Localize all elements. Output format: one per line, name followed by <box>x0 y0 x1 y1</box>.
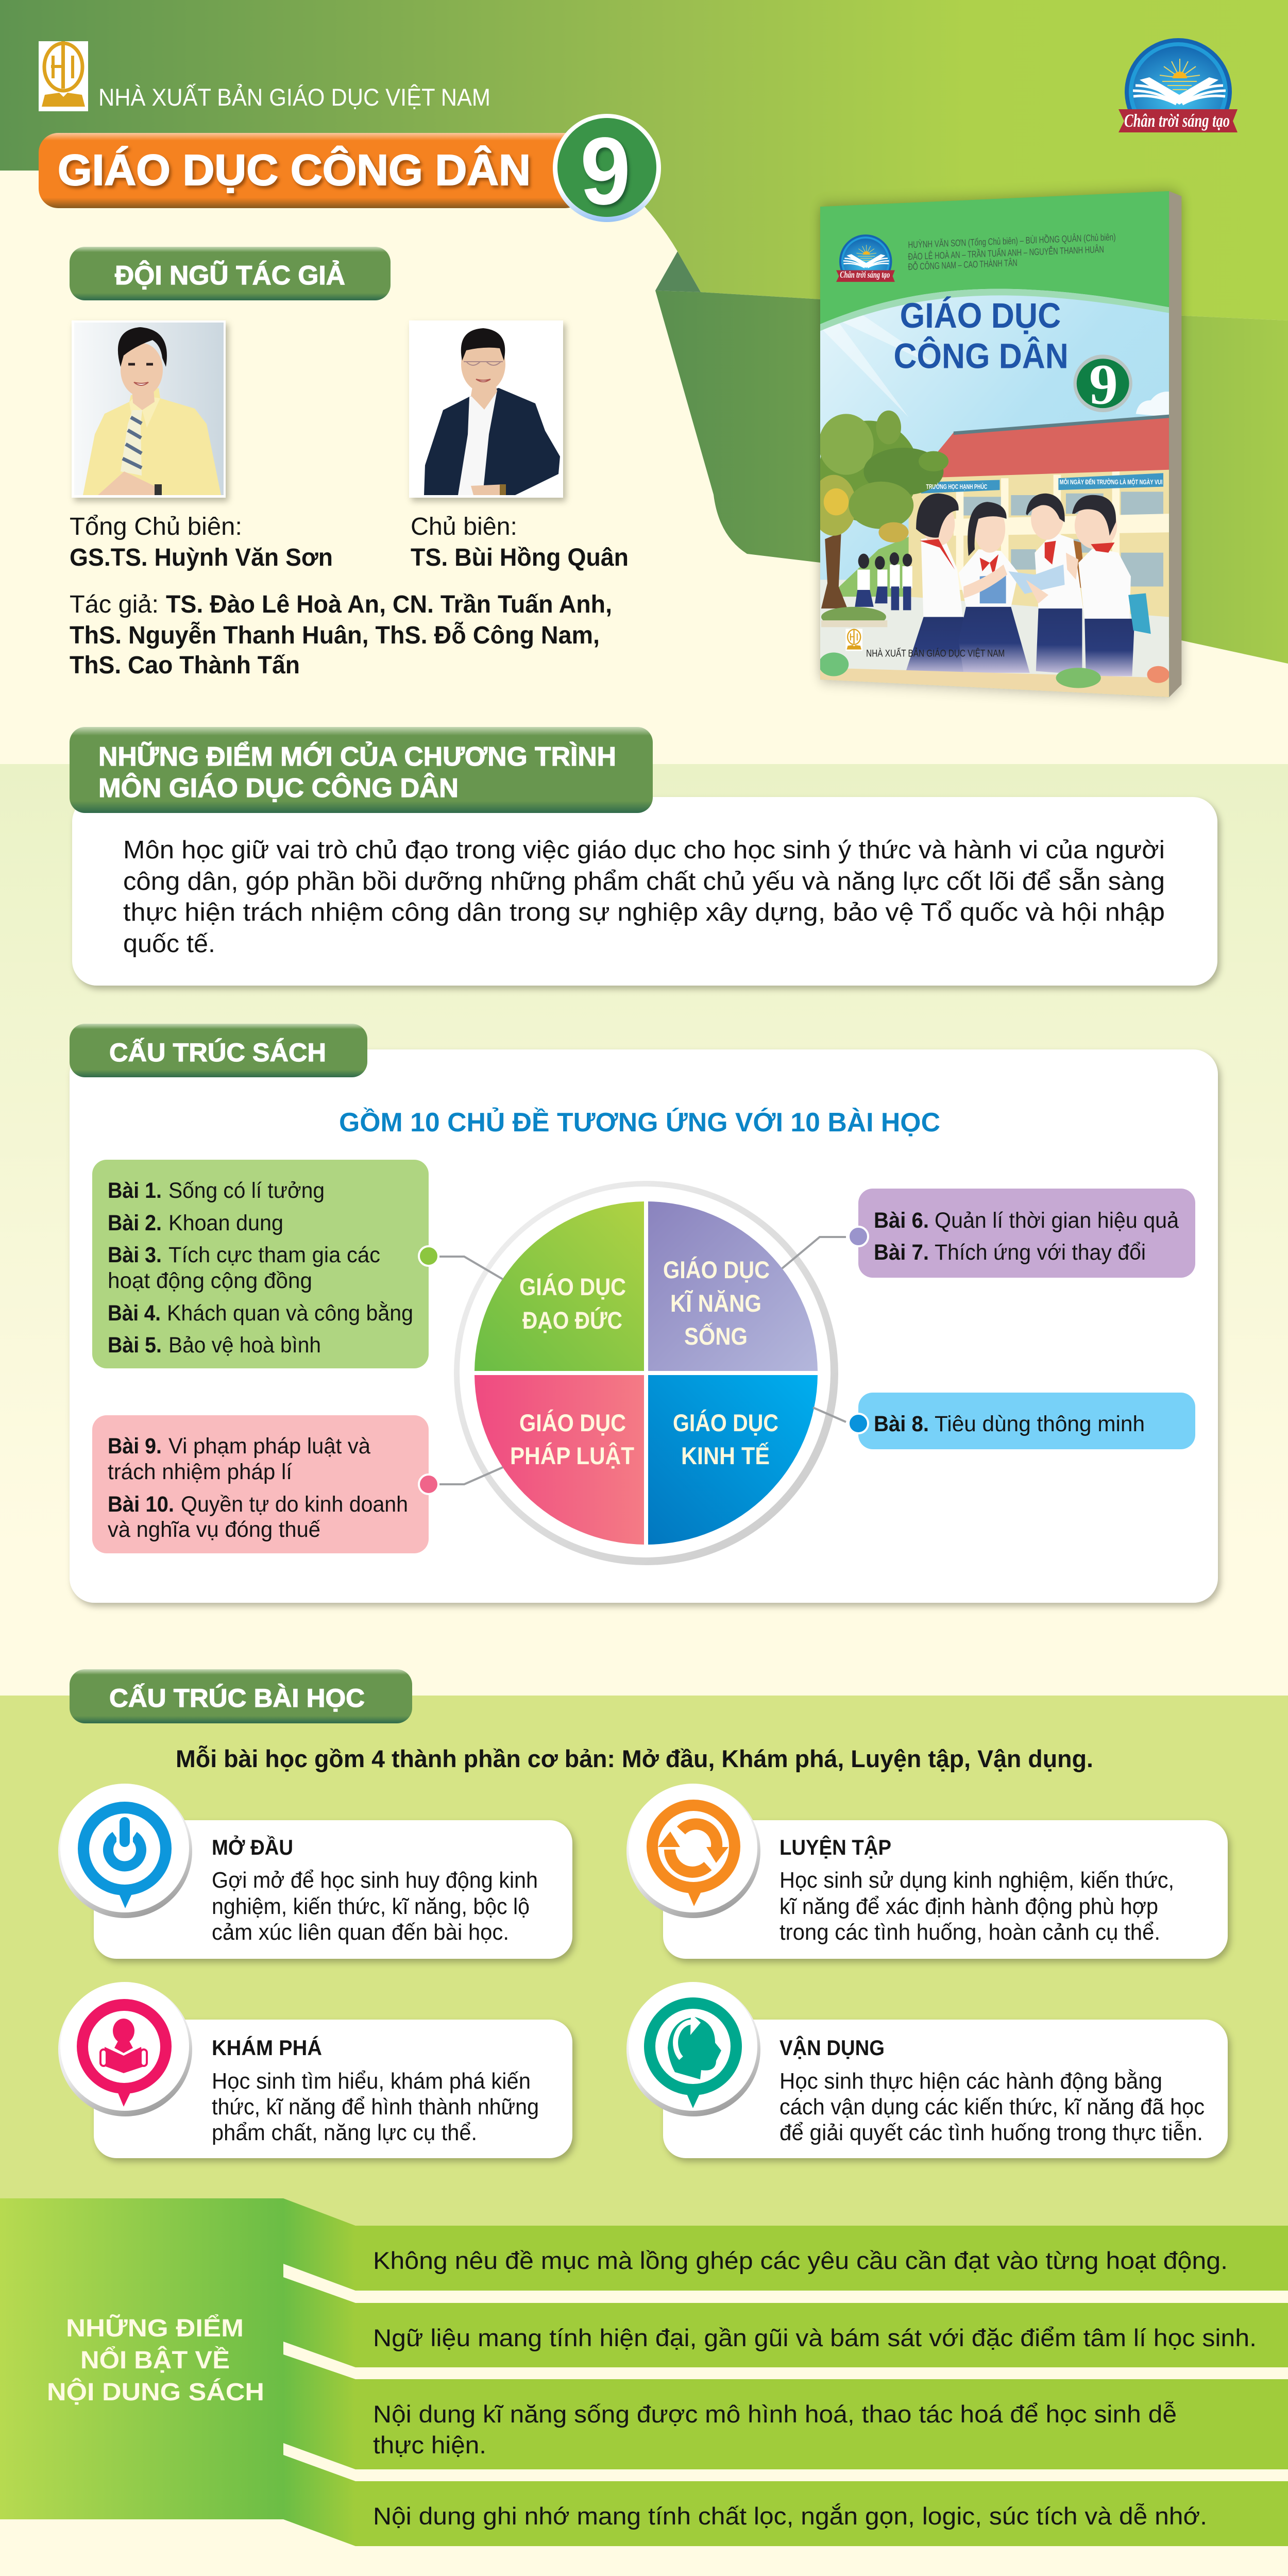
text: authors: ThS. Nguyễn Thanh Huân, ThS. Đỗ Công Nam, <box>70 621 600 649</box>
book authors: ĐÀO LÊ HOÀ AN – TRẦN TUẤN ANH – NGUYỄN THANH HUÂN <box>908 244 1104 262</box>
quadrant: law education <box>474 1375 644 1545</box>
title banner: 9 <box>580 118 631 225</box>
box: economic education lesson: Tiêu dùng thông minh <box>935 1412 1145 1436</box>
card: explore: thức, kĩ năng để hình thành những <box>212 2094 539 2120</box>
book authors: HUỲNH VĂN SƠN (Tổng Chủ biên) – BÙI HỒNG QUÂN (Chủ biên) <box>908 231 1116 250</box>
band: highlight 3: Nội dung kĩ năng sống được mô hình hoá, thao tác hoá để học sinh dễ <box>373 2400 1177 2428</box>
box: law education lessons: Quyền tự do kinh doanh <box>181 1492 408 1517</box>
box: life skills lessons: Bài 6. <box>874 1208 929 1233</box>
text: authors <box>70 591 612 679</box>
icon: power <box>58 1784 192 1918</box>
block: content highlights: NỔI BẬT VỀ <box>80 2346 230 2374</box>
title banner: GIÁO DỤC CÔNG DÂN <box>58 146 531 194</box>
quadrant: law education: PHÁP LUẬT <box>510 1442 634 1469</box>
box: moral education lessons: Bài 3. <box>108 1243 162 1267</box>
band: highlight 1 <box>355 2226 1288 2291</box>
quadrant: life skills: SỐNG <box>684 1323 748 1350</box>
card: application: VẬN DỤNG <box>779 2035 885 2060</box>
book grade badge: 9 <box>1089 353 1118 417</box>
box: moral education lessons: Bài 1. <box>108 1178 162 1203</box>
box: moral education lessons: Bài 4. <box>108 1301 161 1326</box>
connector lines <box>439 1237 846 1484</box>
box: law education lessons: Bài 9. <box>108 1434 162 1459</box>
card: opening: nghiệm, kiến thức, kĩ năng, bộc lộ <box>212 1894 530 1919</box>
heading: book structure: CẤU TRÚC SÁCH <box>109 1038 326 1067</box>
block: content highlights <box>0 2198 283 2519</box>
quadrant: economic education: KINH TẾ <box>681 1442 770 1469</box>
text: chief editor: Tổng Chủ biên: <box>70 513 242 540</box>
text: program description <box>123 836 1165 958</box>
band: highlight 1: Không nêu đề mục mà lồng ghép các yêu cầu cần đạt vào từng hoạt động. <box>373 2247 1228 2274</box>
band: highlight 2 <box>355 2303 1288 2367</box>
book logo: Chân trời sáng tạo <box>840 270 890 280</box>
card: practice: trong các tình huống, hoàn cảnh cụ thể. <box>779 1920 1160 1945</box>
card: practice <box>626 1784 1228 1959</box>
box: moral education lessons: Khoan dung <box>168 1211 283 1235</box>
text: authors: TS. Đào Lê Hoà An, CN. Trần Tuấn Anh, <box>166 591 612 618</box>
book title <box>893 295 1069 376</box>
box: moral education lessons: hoạt động cộng đồng <box>108 1268 312 1293</box>
quadrant: moral education: ĐẠO ĐỨC <box>522 1307 622 1334</box>
text: editor <box>411 513 629 571</box>
icon: head with arrow <box>626 1982 760 2116</box>
book logo <box>836 234 895 282</box>
card: application: Học sinh thực hiện các hành động bằng <box>779 2069 1162 2094</box>
box: moral education lessons: Bảo vệ hoà bình <box>168 1333 321 1358</box>
lesson structure summary: Mỗi bài học gồm 4 thành phần cơ bản: Mở đầu, Khám phá, Luyện tập, Vận dụng. <box>176 1745 1093 1772</box>
book cover: main textbook <box>804 180 1181 705</box>
card: explore <box>58 1982 572 2158</box>
band: highlight 4 <box>355 2481 1288 2546</box>
box: economic education lesson <box>858 1393 1195 1449</box>
section background: lesson structure <box>0 1696 1288 2226</box>
box: life skills lessons: Thích ứng với thay đổi <box>935 1240 1146 1265</box>
slanted connectors <box>283 2198 355 2546</box>
card: opening: Gợi mở để học sinh huy động kinh <box>212 1868 538 1893</box>
text: chief editor <box>70 513 333 571</box>
heading: lesson structure <box>70 1669 412 1723</box>
card: opening: MỞ ĐẦU <box>212 1835 293 1859</box>
topic circle chart <box>454 1181 838 1565</box>
quadrant: economic education <box>648 1375 818 1545</box>
quadrant: law education: GIÁO DỤC <box>519 1409 626 1436</box>
dark green leaf shape <box>655 291 1288 664</box>
band: highlight 3 <box>355 2379 1288 2469</box>
heading: new points <box>70 727 653 813</box>
section background: program <box>0 764 1288 1588</box>
text: program description: công dân, góp phần bồi dưỡng những phẩm chất chủ yếu và năng lực cốt lõi để sẵn sàng <box>123 868 1165 895</box>
box: law education lessons <box>92 1415 429 1553</box>
book title: GIÁO DỤC <box>900 295 1061 335</box>
box: life skills lessons: Bài 7. <box>874 1240 929 1265</box>
connector dots <box>419 1227 868 1494</box>
box: law education lessons: trách nhiệm pháp lí <box>108 1460 292 1484</box>
band: highlight 2: Ngữ liệu mang tính hiện đại, gần gũi và bám sát với đặc điểm tâm lí học sinh. <box>373 2324 1257 2351</box>
quadrant: moral education: GIÁO DỤC <box>519 1273 626 1300</box>
header green background <box>0 0 1288 320</box>
book signs <box>926 479 1163 491</box>
heading: author team <box>70 247 391 300</box>
card: practice: Học sinh sử dụng kinh nghiệm, kiến thức, <box>779 1868 1174 1893</box>
book authors <box>908 231 1116 273</box>
box: law education lessons: Vi phạm pháp luật và <box>168 1434 370 1459</box>
icon: reader <box>58 1982 192 2116</box>
text: authors: Tác giả: <box>70 591 159 618</box>
quadrant: moral education <box>474 1201 644 1371</box>
box: economic education lesson: Bài 8. <box>874 1412 929 1436</box>
panel: book structure <box>70 1024 1218 1603</box>
book authors: ĐỖ CÔNG NAM – CAO THÀNH TÂN <box>908 257 1018 273</box>
text: editor: TS. Bùi Hồng Quân <box>411 544 629 571</box>
panel: new points <box>70 727 1217 986</box>
book signs: MỖI NGÀY ĐẾN TRƯỜNG LÀ MỘT NGÀY VUI <box>1060 479 1163 486</box>
photo: editor <box>409 320 563 498</box>
text: program description: Môn học giữ vai trò chủ đạo trong việc giáo dục cho học sinh ý thức và hành vi của người <box>123 836 1165 864</box>
photo: chief editor <box>72 320 226 498</box>
quadrant: life skills <box>648 1201 818 1371</box>
card: explore: Học sinh tìm hiểu, khám phá kiến <box>212 2069 531 2094</box>
text: authors: ThS. Cao Thành Tấn <box>70 652 300 679</box>
card: opening: cảm xúc liên quan đến bài học. <box>212 1920 509 1945</box>
publisher logo <box>39 41 88 111</box>
book publisher: NHÀ XUẤT BẢN GIÁO DỤC VIỆT NAM <box>866 647 1005 659</box>
quadrant: economic education: GIÁO DỤC <box>673 1409 778 1436</box>
box: life skills lessons: Quản lí thời gian hiệu quả <box>935 1208 1179 1233</box>
book signs: TRƯỜNG HỌC HẠNH PHÚC <box>926 483 988 491</box>
box: moral education lessons: Khách quan và công bằng <box>167 1301 413 1326</box>
box: moral education lessons: Bài 5. <box>108 1333 162 1358</box>
text: chief editor: GS.TS. Huỳnh Văn Sơn <box>70 544 333 571</box>
book publisher <box>845 629 1005 659</box>
band: highlight 4: Nội dung ghi nhớ mang tính chất lọc, ngắn gọn, logic, súc tích và dễ nhớ. <box>373 2502 1207 2530</box>
text: program description: quốc tế. <box>123 930 215 958</box>
heading: new points: NHỮNG ĐIỂM MỚI CỦA CHƯƠNG TRÌNH <box>98 741 616 772</box>
box: moral education lessons: Sống có lí tưởng <box>168 1178 325 1203</box>
quadrant: life skills: KĨ NĂNG <box>670 1290 761 1317</box>
book title: CÔNG DÂN <box>893 336 1069 376</box>
series logo <box>1118 38 1238 132</box>
box: life skills lessons <box>858 1189 1195 1278</box>
small leaf fold <box>655 251 701 292</box>
heading: lesson structure: CẤU TRÚC BÀI HỌC <box>109 1684 365 1713</box>
text: editor: Chủ biên: <box>411 513 517 540</box>
card: explore: KHÁM PHÁ <box>212 2036 322 2060</box>
heading: author team: ĐỘI NGŨ TÁC GIẢ <box>115 260 345 291</box>
book grade badge <box>1073 353 1132 417</box>
card: explore: phẩm chất, năng lực cụ thể. <box>212 2120 477 2145</box>
box: moral education lessons: Bài 2. <box>108 1211 162 1235</box>
quadrant: life skills: GIÁO DỤC <box>663 1256 770 1283</box>
series logo: Chân trời sáng tạo <box>1124 110 1230 131</box>
band: highlight 3: thực hiện. <box>373 2431 486 2459</box>
box: law education lessons: và nghĩa vụ đóng thuế <box>108 1517 320 1542</box>
box: moral education lessons: Tích cực tham gia các <box>168 1243 380 1267</box>
box: law education lessons: Bài 10. <box>108 1492 174 1517</box>
card: application: cách vận dụng các kiến thức, kĩ năng đã học <box>779 2094 1205 2120</box>
publisher name: NHÀ XUẤT BẢN GIÁO DỤC VIỆT NAM <box>98 83 490 111</box>
heading: book structure <box>70 1024 367 1077</box>
card: application: để giải quyết các tình huống trong thực tiễn. <box>779 2120 1203 2145</box>
card: application <box>626 1982 1228 2158</box>
card: opening <box>58 1784 572 1959</box>
text: program description: thực hiện trách nhiệm công dân trong sự nghiệp xây dựng, bảo vệ Tổ quốc và hội nhập <box>123 899 1165 926</box>
subheading: ten topics: GỒM 10 CHỦ ĐỀ TƯƠNG ỨNG VỚI 10 BÀI HỌC <box>339 1107 940 1138</box>
heading: new points: MÔN GIÁO DỤC CÔNG DÂN <box>98 773 459 803</box>
block: content highlights: NHỮNG ĐIỂM <box>66 2314 244 2342</box>
box: moral education lessons <box>92 1160 429 1368</box>
title banner <box>39 114 661 225</box>
block: content highlights: NỘI DUNG SÁCH <box>47 2378 264 2406</box>
card: practice: LUYỆN TẬP <box>779 1835 891 1859</box>
icon: refresh arrows <box>626 1784 760 1918</box>
card: practice: kĩ năng để xác định hành động phù hợp <box>779 1894 1158 1919</box>
